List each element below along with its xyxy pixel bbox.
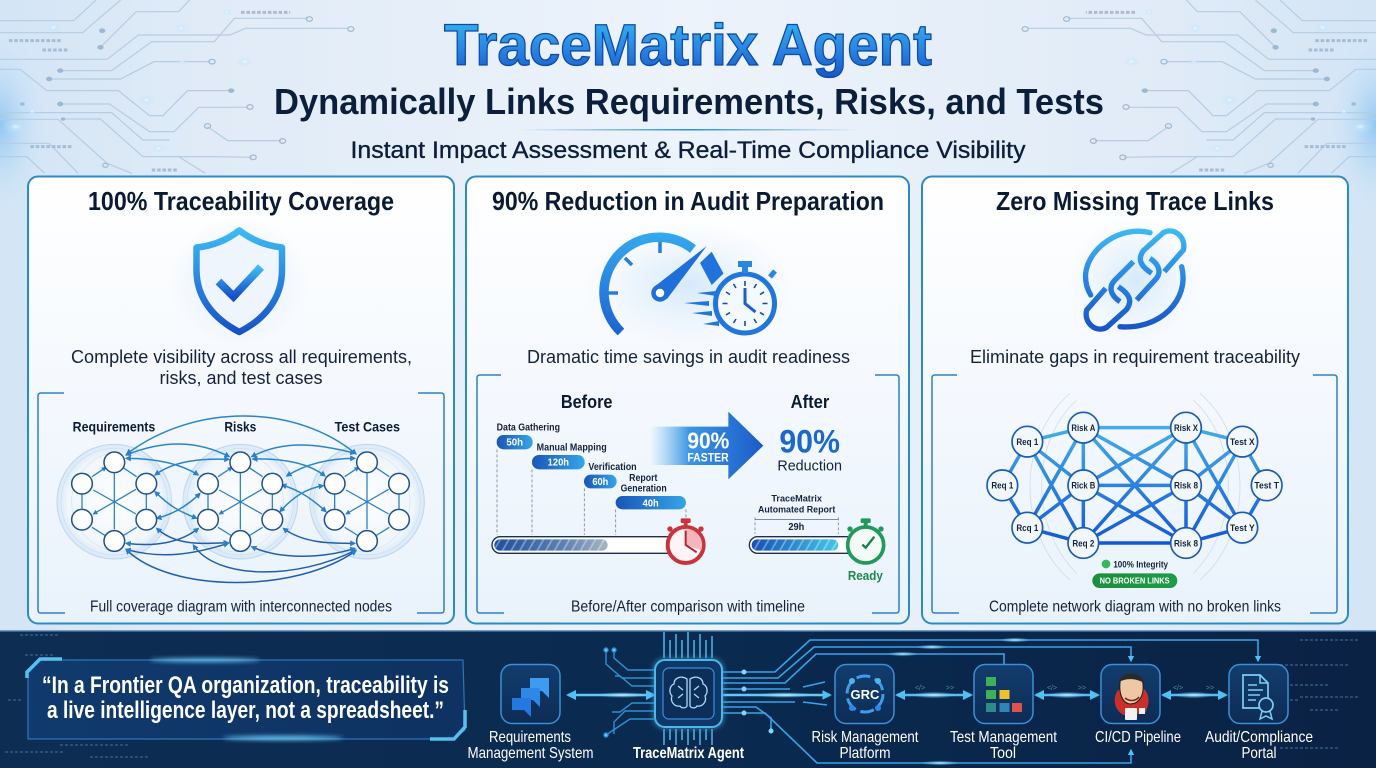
- arrow: pipeline to audit: </>: [1173, 685, 1183, 692]
- phase: manual mapping: 120h: [548, 458, 569, 469]
- before after comparison: [492, 391, 884, 583]
- tile: audit portal: Audit/Compliance: [1205, 729, 1313, 746]
- description: Complete visibility across all requirements,: [71, 347, 412, 367]
- heading: 90% Reduction in Audit Preparation: [492, 186, 884, 216]
- tile: test tool: Test Management: [950, 729, 1057, 746]
- description: [71, 347, 412, 388]
- tagline: Instant Impact Assessment & Real-Time Compliance Visibility: [350, 137, 1026, 164]
- arrow: pipeline to audit: >>: [1206, 685, 1214, 692]
- panel card: [466, 176, 909, 624]
- arrow: 90 percent faster: FASTER: [687, 451, 729, 464]
- icon: speedometer and stopwatch: [583, 223, 793, 347]
- tile: test tool: [950, 664, 1057, 762]
- arrow: 90 percent faster: 90%: [687, 427, 729, 453]
- phase: manual mapping: [532, 443, 607, 469]
- icon: shield with check: [169, 217, 309, 347]
- panel card: [28, 176, 454, 624]
- node labels: [991, 423, 1279, 548]
- tile: requirements system: Management System: [468, 745, 594, 762]
- left circuit decoration: [0, 0, 354, 173]
- footer band: [0, 630, 1376, 768]
- timeline dashed guides: [497, 449, 686, 535]
- automated report label: Automated Report: [758, 504, 835, 514]
- automated report label: [755, 493, 838, 534]
- quote callout: a live intelligence layer, not a spreadsheet.”: [47, 697, 444, 724]
- subtitle: Dynamically Links Requirements, Risks, and Tests: [274, 81, 1104, 122]
- after progress bar: [749, 537, 863, 553]
- network links: [1002, 428, 1267, 543]
- tile: risk platform: Platform: [840, 745, 890, 762]
- result: 90 percent reduction: Reduction: [777, 458, 842, 474]
- tile: requirements system: [468, 664, 594, 762]
- arrow: test to pipeline: >>: [1078, 685, 1086, 692]
- quote callout: “In a Frontier QA organization, traceability is: [42, 672, 449, 699]
- arrow: test to pipeline: </>: [1047, 685, 1057, 692]
- phase: report generation: Report: [629, 473, 658, 484]
- caption: Complete network diagram with no broken links: [989, 598, 1281, 616]
- lower cross-cluster links: [126, 528, 356, 582]
- node labels: Risk X: [1174, 423, 1199, 433]
- network nodes: [987, 412, 1282, 558]
- phase: manual mapping: Manual Mapping: [537, 443, 607, 454]
- coverage diagram: [57, 416, 424, 582]
- caption: Full coverage diagram with interconnected nodes: [90, 598, 392, 616]
- description: risks, and test cases: [160, 368, 322, 388]
- after heading: After: [791, 391, 829, 412]
- panel: traceability coverage: [28, 176, 454, 624]
- integrity status: 100% Integrity: [1113, 559, 1169, 569]
- agent to platform circuit: [722, 638, 1258, 766]
- arrow: risk to test: [897, 685, 971, 698]
- icon: green stopwatch: [847, 518, 884, 563]
- internal links: [82, 467, 399, 536]
- tile: test tool: Tool: [990, 745, 1016, 762]
- icon: red stopwatch: [667, 518, 704, 563]
- title divider: [520, 129, 860, 130]
- arrow: risk to test: </>: [915, 685, 925, 692]
- tile: audit portal: [1205, 664, 1313, 762]
- panel: zero missing links: [922, 176, 1348, 624]
- phase: data gathering: Data Gathering: [497, 423, 560, 434]
- column labels: [73, 418, 400, 434]
- left edge glow: [0, 35, 48, 215]
- description: Dramatic time savings in audit readiness: [527, 347, 850, 367]
- result: 90 percent reduction: 90%: [779, 424, 840, 460]
- result: 90 percent reduction: [777, 424, 842, 474]
- node labels: Rcq 1: [1016, 523, 1038, 533]
- badge: no broken links: NO BROKEN LINKS: [1100, 576, 1170, 586]
- node labels: Test T: [1254, 481, 1279, 491]
- cross-cluster links: [126, 416, 356, 518]
- phase: data gathering: [497, 423, 560, 449]
- phase: data gathering: 50h: [506, 438, 523, 449]
- node labels: Risk A: [1071, 423, 1096, 433]
- panel card: [922, 176, 1348, 624]
- node labels: Risk 8: [1174, 481, 1198, 491]
- node labels: Req 1: [991, 481, 1013, 491]
- heading: Zero Missing Trace Links: [996, 186, 1274, 216]
- node labels: Test X: [1230, 437, 1255, 447]
- node labels: Test Y: [1230, 523, 1255, 533]
- right circuit decoration: [1022, 0, 1376, 173]
- phase: report generation: 40h: [643, 498, 659, 509]
- tile: risk platform: GRC: [851, 687, 880, 702]
- right edge glow: [1328, 35, 1376, 215]
- column labels: Requirements: [73, 418, 156, 434]
- automated report label: TraceMatrix: [771, 493, 823, 503]
- arrow: risk to test: >>: [946, 685, 954, 692]
- phase: verification: 60h: [592, 477, 608, 488]
- caption: Before/After comparison with timeline: [571, 598, 805, 616]
- node labels: Req 1: [1016, 437, 1038, 447]
- nodes: [72, 452, 409, 551]
- tile: risk platform: [812, 664, 919, 762]
- panel: audit preparation: [466, 176, 909, 624]
- column labels: Risks: [224, 418, 257, 434]
- phase: report generation: Generation: [621, 484, 667, 495]
- quote callout: [27, 658, 465, 740]
- network diagram: [987, 393, 1282, 588]
- phase: report generation: [616, 473, 686, 509]
- diagram frame: [38, 393, 444, 613]
- tile: ci cd pipeline: [1095, 664, 1181, 746]
- node labels: Req 2: [1072, 538, 1094, 548]
- tile: requirements system: Requirements: [489, 729, 571, 746]
- arrow: 90 percent faster: [650, 412, 763, 479]
- chip: tracematrix agent: TraceMatrix Agent: [633, 745, 745, 762]
- badge: no broken links: [1092, 573, 1177, 588]
- title: TraceMatrix Agent: [444, 13, 932, 78]
- background arcs: [1030, 393, 1240, 580]
- arrow: test to pipeline: [1036, 685, 1098, 698]
- phase: verification: Verification: [588, 462, 637, 473]
- node labels: Risk 8: [1174, 538, 1198, 548]
- phase: verification: [584, 462, 637, 488]
- chip: tracematrix agent: [633, 632, 745, 762]
- diagram frame: [932, 375, 1337, 613]
- icon: chain links: [1068, 217, 1202, 343]
- tile: ci cd pipeline: CI/CD Pipeline: [1095, 729, 1181, 746]
- ready label: Ready: [848, 568, 883, 583]
- node labels: Rick B: [1071, 481, 1096, 491]
- agent to requirements circuit: [568, 648, 654, 737]
- description: Eliminate gaps in requirement traceability: [970, 347, 1300, 367]
- automated report label: 29h: [788, 522, 804, 533]
- cluster halos: [57, 444, 424, 559]
- arrow: pipeline to audit: [1163, 685, 1226, 698]
- diagram frame: [477, 375, 899, 613]
- tile: audit portal: Portal: [1242, 745, 1276, 762]
- heading: 100% Traceability Coverage: [88, 186, 394, 216]
- before progress bar: [492, 537, 689, 553]
- column labels: Test Cases: [335, 418, 400, 434]
- tile: risk platform: Risk Management: [812, 729, 919, 746]
- before heading: Before: [561, 391, 612, 412]
